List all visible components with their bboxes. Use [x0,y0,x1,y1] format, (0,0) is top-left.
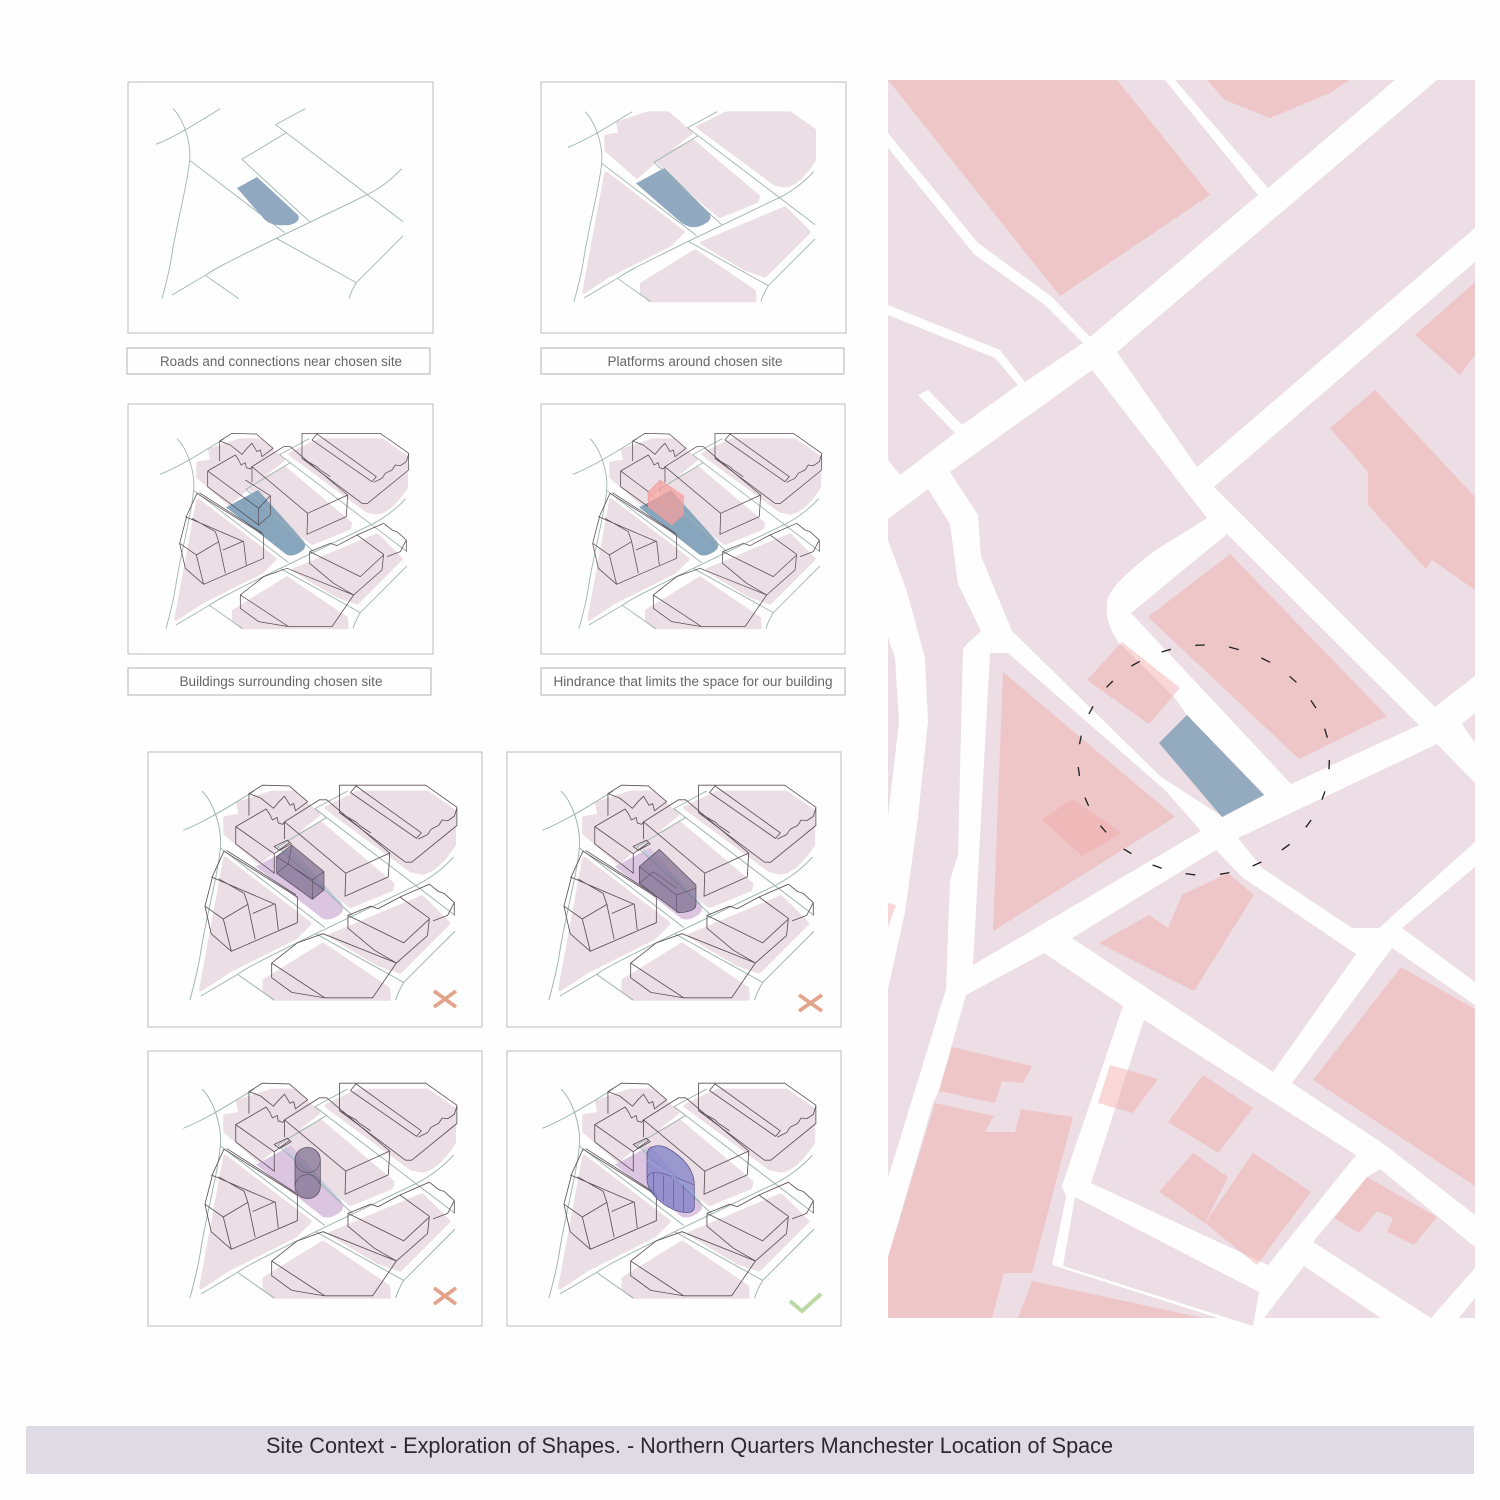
existing buildings [888,80,1475,1318]
icon: rejected cross [434,991,456,1007]
panel: hindrance [541,404,845,654]
icon: accepted check mark [790,1294,821,1311]
caption: roads [127,348,430,374]
panel: option chosen capsule [507,1051,841,1326]
panel: buildings [128,404,433,654]
massing: rectangular block [277,845,324,899]
hindrance volume [648,480,683,525]
surrounding buildings drawing [160,433,409,629]
hindrance drawing [573,433,822,629]
panel: platforms [541,82,846,333]
caption: buildings [128,668,431,695]
context drawing [183,1083,457,1298]
context drawing [542,1083,816,1298]
caption: platforms: Platforms around chosen site [608,354,782,369]
massing: chosen capsule form [647,1146,694,1213]
panel: option box shape [148,752,482,1027]
panel: option rounded block [507,752,841,1027]
map blocks [888,80,1475,1326]
road network [156,109,403,299]
massing: block with rounded end [639,849,696,913]
panel: option cylinder [148,1051,482,1326]
panel: roads and connections [128,82,433,333]
caption: buildings: Buildings surrounding chosen site [180,674,382,689]
icon: rejected cross [799,995,822,1011]
title bar [26,1426,1474,1474]
caption: hindrance [541,668,845,695]
title bar: Site Context - Exploration of Shapes. - Northern Quarters Manchester Location of Space [266,1433,1113,1458]
dashed radius circle [1078,645,1329,875]
context drawing [542,785,816,1000]
site location map [888,80,1475,1326]
chosen site [237,177,299,225]
massing: cylinder [295,1147,320,1199]
chosen site on map [1159,715,1264,817]
caption: hindrance: Hindrance that limits the space for our building [554,674,832,689]
icon: rejected cross [434,1288,456,1304]
caption: roads: Roads and connections near chosen site [160,354,402,369]
caption: platforms [541,348,844,374]
platforms and site [568,112,815,302]
context drawing [183,785,457,1000]
